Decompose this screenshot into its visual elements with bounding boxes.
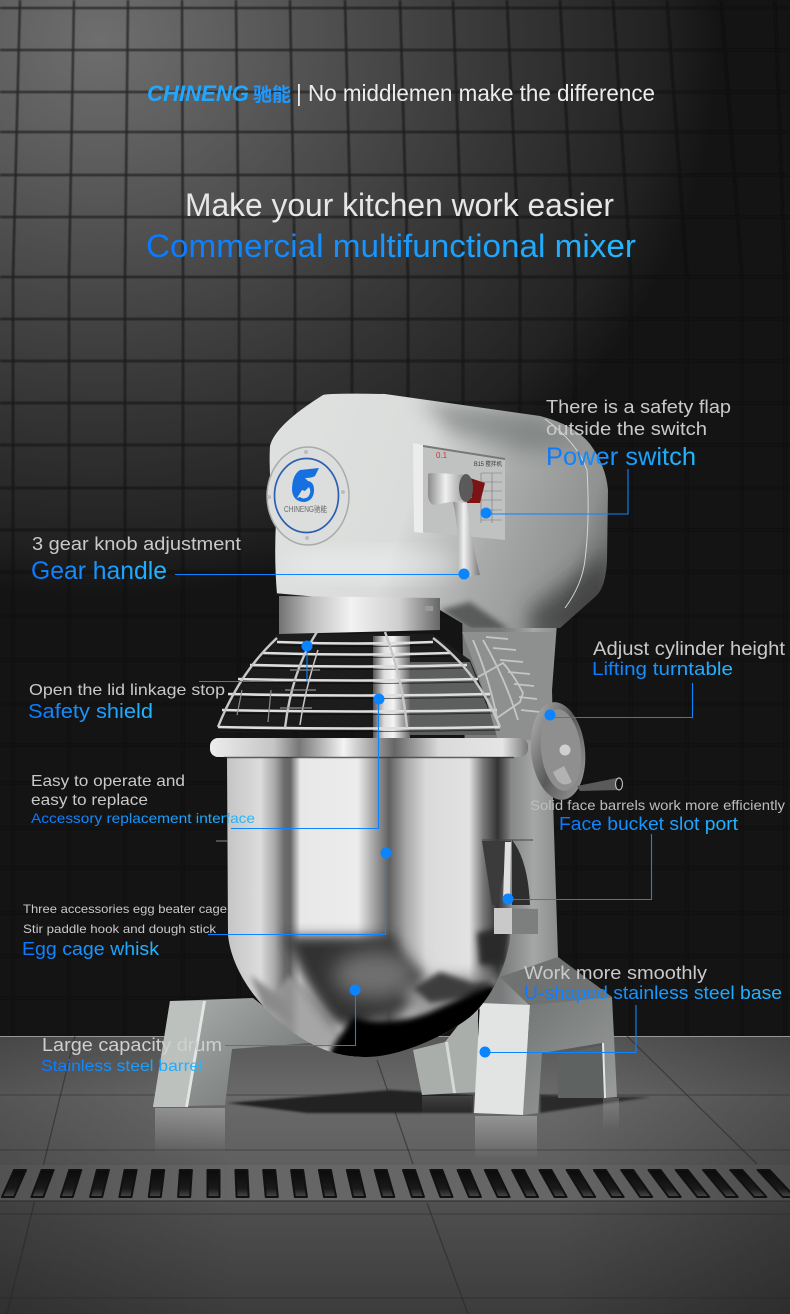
mixing bowl — [210, 738, 528, 1070]
callout: power switch — [480, 396, 731, 518]
callout: egg cage whisk — [22, 848, 392, 959]
interior behind cage — [218, 632, 553, 740]
drainage grate — [0, 1165, 790, 1201]
lifting handwheel — [526, 699, 622, 803]
mixer machine — [153, 394, 650, 1160]
header logo and slogan: | No middlemen make the difference — [296, 80, 655, 106]
callout: lifting turntable — [544, 639, 786, 720]
callout: gear handle: Gear handle — [31, 557, 167, 585]
nameplate and switch: 0.1 — [436, 451, 448, 460]
title: Make your kitchen work easier — [185, 187, 614, 223]
U-shaped base — [153, 957, 617, 1115]
callout: accessory replacement interface — [31, 694, 384, 828]
callout: egg cage whisk: Egg cage whisk — [22, 939, 160, 959]
callout: face bucket slot port — [502, 797, 785, 904]
callout: U-shaped stainless steel base: Work more smoothly — [524, 963, 707, 983]
callout: stainless steel barrel: Stainless steel barrel — [41, 1058, 203, 1075]
callout: power switch: There is a safety flap — [546, 396, 731, 417]
header logo and slogan: 驰能 — [253, 84, 291, 106]
callout: accessory replacement interface: Accessory replacement interface — [31, 810, 255, 826]
nameplate and switch: B15 搅拌机 — [474, 460, 502, 468]
motor head — [270, 394, 610, 640]
callout: lifting turntable: Adjust cylinder height — [593, 639, 786, 660]
callout: power switch: Power switch — [546, 443, 696, 471]
callout: gear handle: 3 gear knob adjustment — [32, 533, 241, 554]
callout: safety shield: Open the lid linkage stop — [29, 682, 225, 699]
callout: face bucket slot port: Solid face barrels work more efficiently — [530, 797, 785, 813]
collar — [279, 596, 440, 634]
nameplate and switch — [413, 443, 505, 577]
callout: safety shield — [28, 640, 312, 723]
callout: U-shaped stainless steel base: U-shaped stainless steel base — [524, 983, 782, 1003]
callout: stainless steel barrel — [41, 984, 360, 1075]
floor with drainage grate — [0, 1036, 790, 1314]
callout: U-shaped stainless steel base — [480, 963, 782, 1058]
title: Commercial multifunctional mixer — [146, 228, 636, 264]
callout: stainless steel barrel: Large capacity drum — [42, 1035, 222, 1055]
safety wire cage — [218, 632, 540, 732]
floor shadow and reflections — [155, 1090, 650, 1160]
column body — [462, 610, 612, 1010]
callout: egg cage whisk: Three accessories egg beater cage — [23, 902, 227, 916]
title — [146, 187, 636, 264]
brand cap on head: CHINENG驰能 — [284, 504, 327, 514]
callout: safety shield: Safety shield — [28, 701, 153, 723]
callout: accessory replacement interface: easy to replace — [31, 792, 148, 809]
callout: power switch: outside the switch — [546, 418, 707, 439]
callout: face bucket slot port: Face bucket slot port — [559, 814, 738, 834]
background: dark tiled wall — [0, 0, 790, 1040]
header logo and slogan: CHINENG — [147, 81, 249, 106]
header logo and slogan — [147, 80, 655, 106]
brand cap on head — [267, 447, 349, 545]
callout: gear handle — [31, 533, 470, 585]
callout: lifting turntable: Lifting turntable — [592, 658, 733, 679]
callout: accessory replacement interface: Easy to operate and — [31, 773, 185, 790]
bucket slot port — [482, 840, 538, 934]
callout: egg cage whisk: Stir paddle hook and dough stick — [23, 922, 217, 936]
